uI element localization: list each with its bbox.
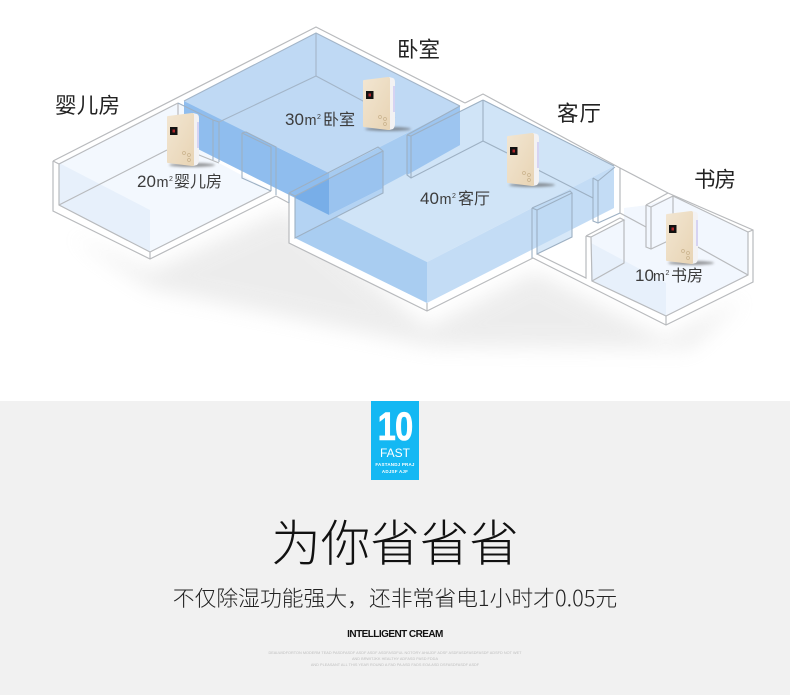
wall overlays (178, 100, 620, 258)
device: bedroom (363, 77, 411, 131)
device: living room (507, 133, 555, 187)
area label: 30 bedroom: m (304, 112, 316, 129)
fine print: DEALWIDFORTON MODERM TEAD PASDFASDF ASDF ASDF ASDFASDFUL NOTORY AHAJDF ADSF ASDFASDFASDFASDF ADSFD NOT WET (268, 651, 522, 655)
fine print: AND PLEASANT ALL THIS YEAR ROUND A FAD PA ASD FADS EOA ASD DSFASDFASDF ASDF (311, 663, 479, 667)
area label: 40 living room: m (440, 191, 452, 208)
panel: bottom section (0, 401, 790, 695)
brand line: INTELLIGENT CREAM (347, 629, 443, 640)
label: bedroom: 卧室 (397, 38, 440, 62)
area label: 40 living room: 客厅 (458, 190, 490, 208)
room: study (537, 168, 753, 325)
badge small text: FASTANDJ PRAJ (375, 462, 415, 467)
area label: 20 baby room: 婴儿房 (174, 173, 222, 191)
label: baby room: 婴儿房 (55, 94, 120, 118)
badge: 10 fast (371, 401, 419, 480)
fine print: AND BRWITJKK HEALTHY ADFASD PASD FDDA (352, 657, 438, 661)
area label: 10 study: 书房 (671, 267, 703, 285)
fine print (268, 651, 522, 667)
room: living room (289, 94, 753, 325)
building footprint (53, 27, 753, 325)
area label: 10 study: 2 (666, 270, 670, 277)
area label: 30 bedroom: 卧室 (323, 111, 355, 129)
subheading: 不仅除湿功能强大，还非常省电1小时才0.05元 (173, 582, 617, 613)
badge small text: ADJSF AJF (382, 469, 408, 474)
badge word: FAST (380, 446, 410, 460)
area label: 30 bedroom: 30 (285, 110, 304, 129)
label: living room: 客厅 (557, 102, 601, 126)
area label: 20 baby room: m (156, 174, 168, 191)
badge small text (375, 462, 415, 474)
area label: 30 bedroom: 2 (317, 114, 321, 121)
area label: 20 baby room: 2 (169, 176, 173, 183)
label: study: 书房 (694, 168, 736, 192)
device: baby room (167, 113, 215, 167)
area label: 10 study: 10 (635, 266, 654, 285)
area label: 40 living room: 2 (452, 193, 456, 200)
device: study (666, 211, 714, 265)
area label: 10 study: m (653, 268, 665, 285)
area label: 40 living room: 40 (420, 189, 439, 208)
heading: 为你省省省 (271, 505, 519, 576)
floor shadow (70, 210, 745, 348)
area label: 20 baby room: 20 (137, 172, 156, 191)
room: baby room (53, 27, 465, 259)
room: bedroom (184, 33, 460, 215)
badge number: 10 (378, 405, 412, 449)
